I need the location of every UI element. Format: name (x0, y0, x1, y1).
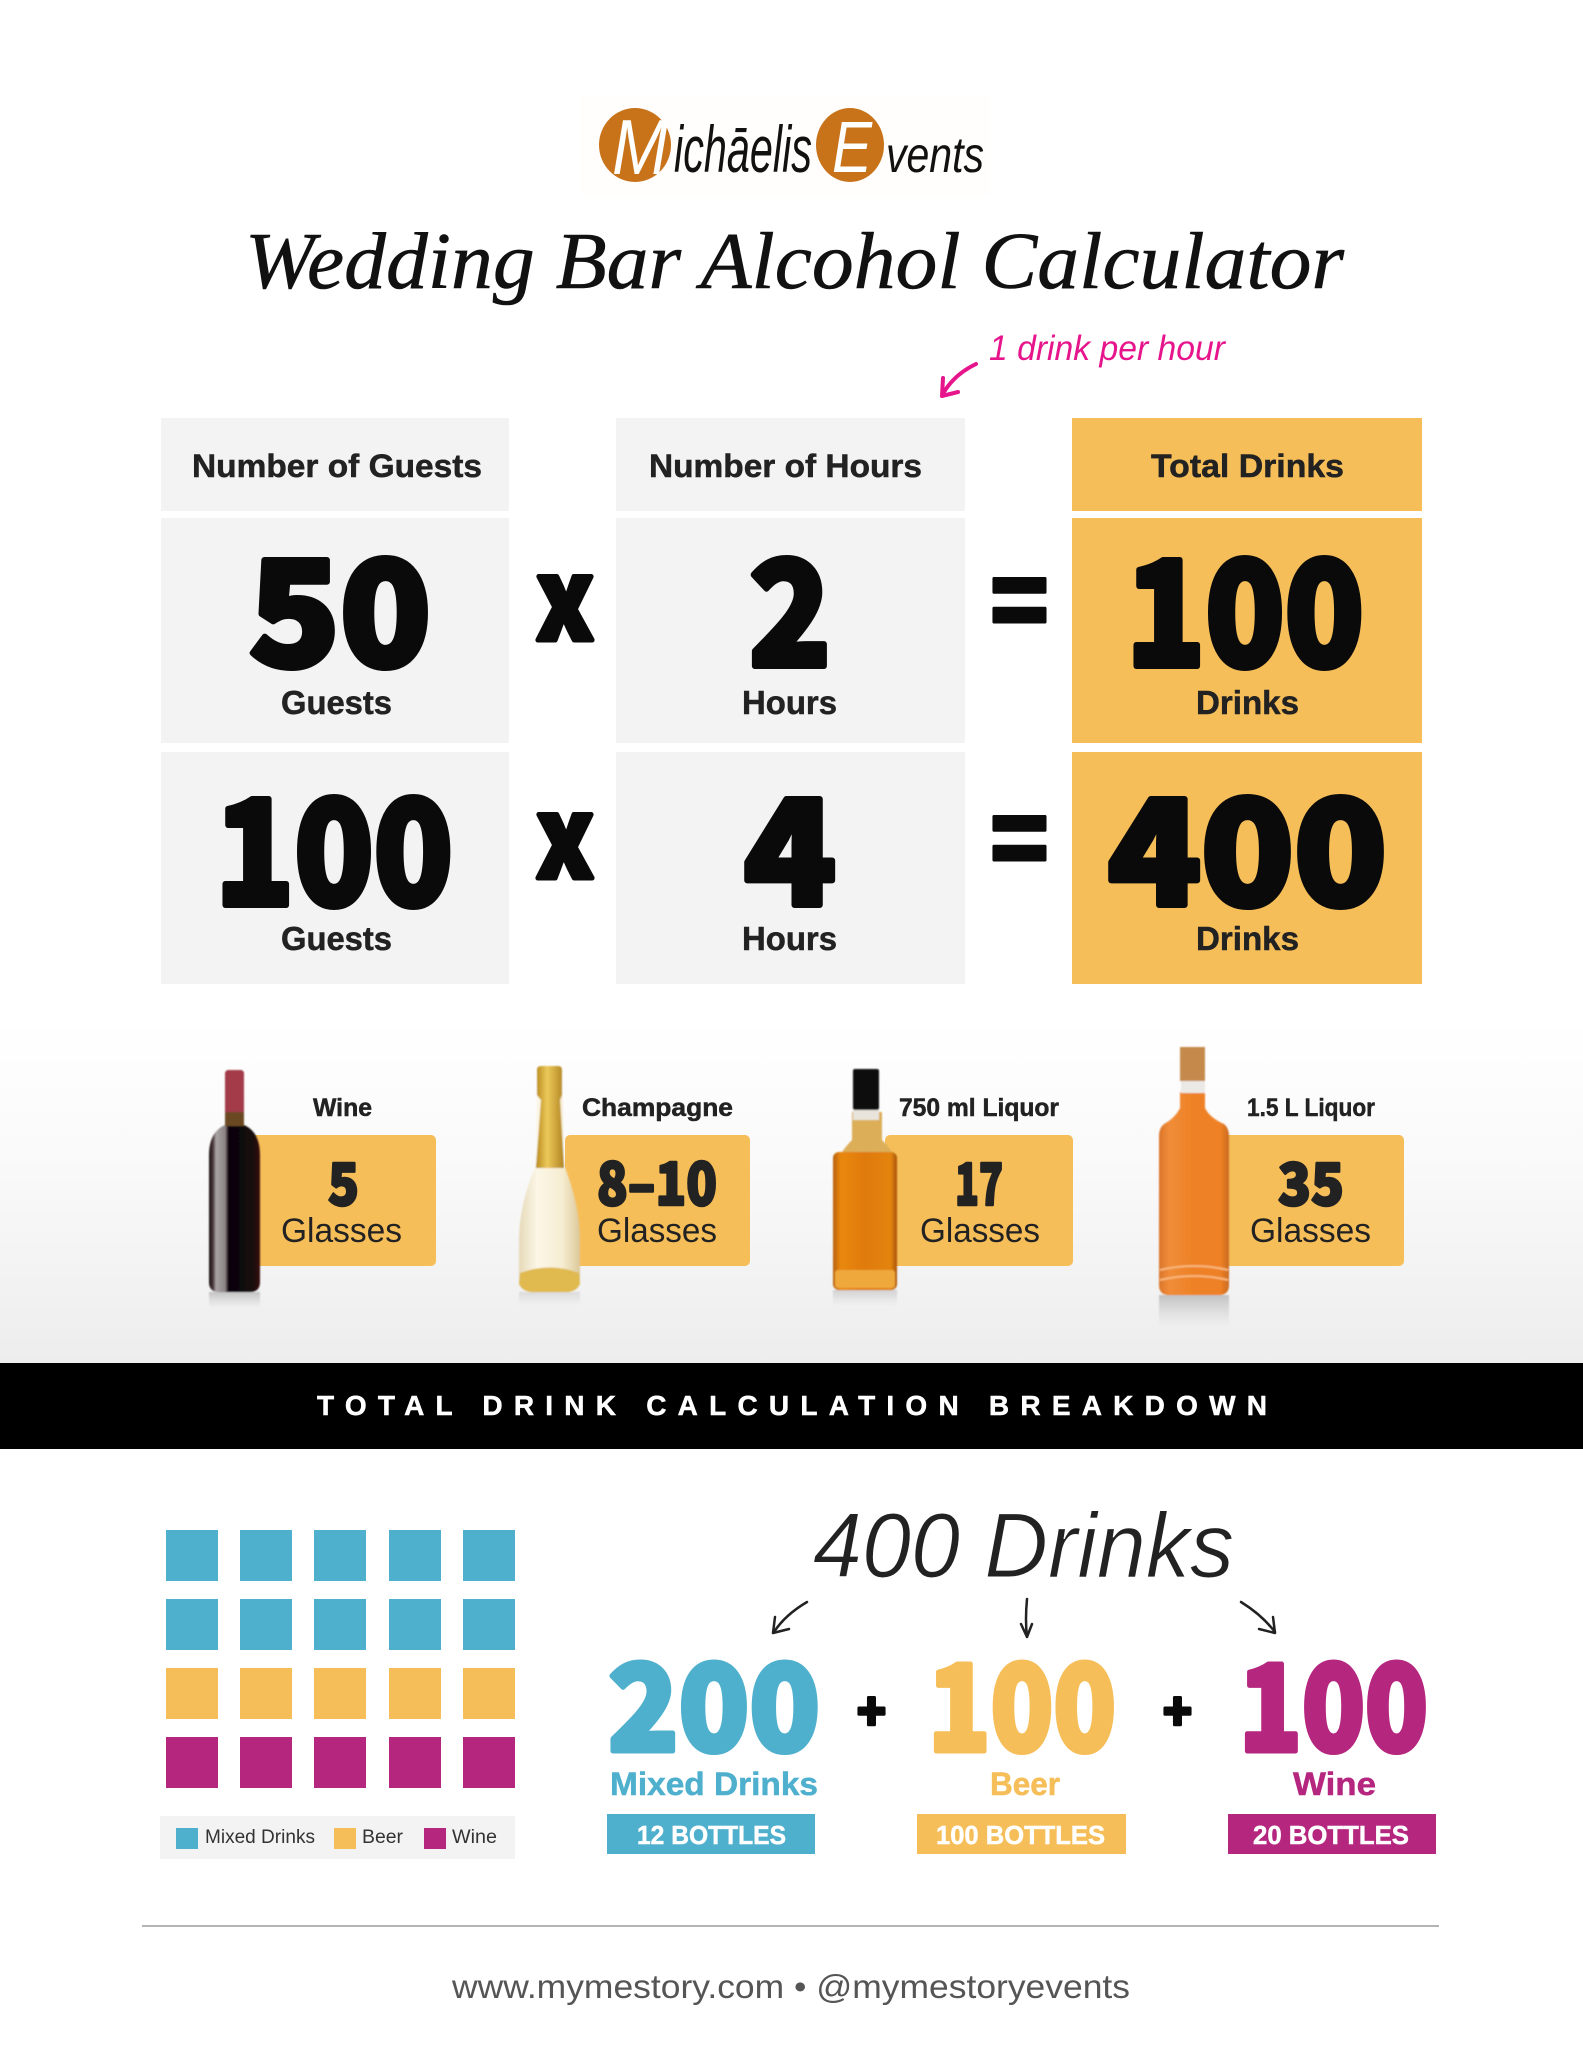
header: number of guests: Number of Guests (192, 448, 482, 484)
row 2: 400 drinks (1072, 737, 1422, 984)
legend: Wine (452, 1827, 497, 1848)
row 2: 4 hours (616, 737, 965, 984)
breakdown: 100 beer: 100 (928, 1612, 1116, 1786)
header: total drinks (1072, 418, 1422, 511)
row 2: 100 guests (161, 737, 509, 984)
divider line (142, 1925, 1439, 1927)
legend: Beer (362, 1827, 404, 1848)
header: number of hours: Number of Hours (649, 448, 922, 484)
breakdown: 100 beer: 100 BOTTLES (936, 1820, 1105, 1850)
card: 1.5 L liquor: Glasses (1250, 1212, 1371, 1250)
card: champagne: Glasses (597, 1212, 717, 1250)
card: champagne (565, 1094, 750, 1266)
card: wine (250, 1094, 436, 1266)
logo: Michaelis Events: E (832, 108, 873, 188)
banner: total drink calculation breakdown (0, 1363, 1583, 1449)
logo: Michaelis Events (580, 95, 990, 195)
icon: 750 ml liquor bottle (833, 1069, 897, 1306)
card: wine: Glasses (281, 1212, 402, 1250)
operator: times: x (536, 749, 594, 911)
operator: times: x (536, 511, 594, 673)
icon: champagne bottle (519, 1066, 580, 1306)
breakdown: 100 wine (1228, 1612, 1436, 1854)
card: 1.5 L liquor: 35 (1278, 1138, 1344, 1222)
operator: equals: = (990, 752, 1049, 912)
breakdown: 200 mixed drinks: 200 (608, 1612, 820, 1786)
card: 750 ml liquor: 17 (955, 1138, 1003, 1222)
row 1: 2 hours: Hours (742, 684, 837, 721)
annotation: 1 drink per hour (942, 329, 1226, 396)
row 1: 2 hours: 2 (749, 498, 831, 709)
legend: Mixed Drinks (205, 1827, 315, 1848)
banner: total drink calculation breakdown: TOTAL DRINK CALCULATION BREAKDOWN (317, 1390, 1267, 1421)
row 1: 50 guests: Guests (281, 684, 392, 721)
row 2: 4 hours: Hours (742, 920, 837, 957)
operator: equals: = (990, 514, 1049, 674)
header: total drinks: Total Drinks (1151, 448, 1344, 484)
arrows from total to categories (773, 1599, 1275, 1637)
card: champagne: 8–10 (597, 1138, 717, 1222)
icon: wine bottle (209, 1070, 260, 1308)
icon: 1.5 L liquor bottle (1159, 1047, 1229, 1327)
breakdown: 100 wine: 20 BOTTLES (1253, 1820, 1409, 1850)
waffle chart: drink share (166, 1530, 515, 1788)
heading: 400 drinks: 400 Drinks (813, 1495, 1234, 1597)
card: 750 ml liquor (885, 1094, 1073, 1266)
breakdown: 200 mixed drinks: Mixed Drinks (610, 1766, 818, 1802)
row 2: 400 drinks: 400 (1108, 737, 1387, 948)
row 1: 50 guests: 50 (249, 498, 431, 709)
row 1: 100 drinks (1072, 498, 1422, 743)
annotation: 1 drink per hour: 1 drink per hour (989, 329, 1226, 368)
card: champagne: Champagne (582, 1094, 733, 1122)
panel: glasses per bottle (0, 1020, 1583, 1364)
row 1: 50 guests (161, 498, 509, 743)
legend (160, 1816, 515, 1859)
card: wine: 5 (328, 1138, 359, 1222)
logo: Michaelis Events: ichāelis (674, 112, 812, 186)
title: Wedding Bar Alcohol Calculator (245, 218, 1345, 306)
breakdown: 100 wine: 100 (1239, 1612, 1428, 1786)
breakdown: 200 mixed drinks (607, 1612, 820, 1854)
card: wine: Wine (313, 1094, 372, 1122)
breakdown: 100 beer (917, 1612, 1126, 1854)
row 1: 100 drinks: 100 (1126, 498, 1364, 709)
card: 1.5 L liquor (1215, 1094, 1404, 1266)
row 1: 2 hours (616, 498, 965, 743)
card: 750 ml liquor: Glasses (920, 1212, 1040, 1250)
breakdown: 200 mixed drinks: 12 BOTTLES (637, 1820, 786, 1850)
operator: plus: + (857, 1673, 886, 1745)
row 2: 100 guests: 100 (215, 737, 453, 948)
card: 1.5 L liquor: 1.5 L Liquor (1247, 1094, 1375, 1122)
row 1: 100 drinks: Drinks (1196, 684, 1299, 721)
header: number of hours (616, 418, 965, 511)
card: 750 ml liquor: 750 ml Liquor (899, 1094, 1059, 1122)
row 2: 100 guests: Guests (281, 920, 392, 957)
logo: Michaelis Events: M (612, 103, 668, 191)
breakdown: 100 beer: Beer (990, 1766, 1060, 1802)
calculator table (161, 418, 1422, 984)
header: number of guests (161, 418, 509, 511)
footer: website and handle: www.mymestory.com • @mymestoryevents (451, 1968, 1130, 2005)
row 2: 4 hours: 4 (744, 737, 836, 948)
operator: plus: + (1163, 1673, 1192, 1745)
breakdown: 100 wine: Wine (1293, 1766, 1376, 1802)
row 2: 400 drinks: Drinks (1196, 920, 1299, 957)
logo: Michaelis Events: vents (886, 127, 984, 183)
